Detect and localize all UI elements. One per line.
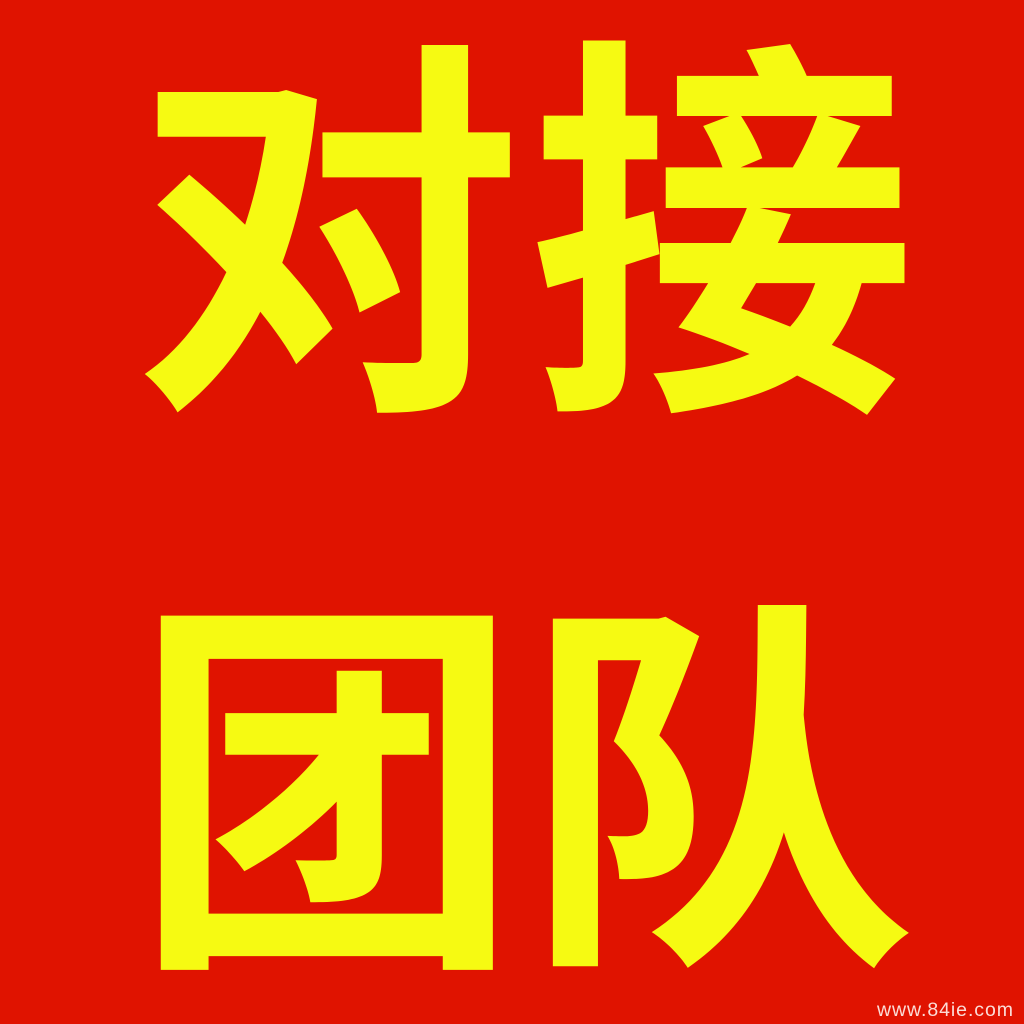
watermark: www.84ie.com <box>876 999 1013 1021</box>
heading line 1: 对接 <box>132 19 916 464</box>
character: 队: 队 <box>520 582 916 1016</box>
character: 团: 团 <box>133 578 521 1018</box>
character: 接: 接 <box>529 19 916 464</box>
heading line 2: 团队 <box>133 578 916 1018</box>
character: 对: 对 <box>132 23 523 461</box>
